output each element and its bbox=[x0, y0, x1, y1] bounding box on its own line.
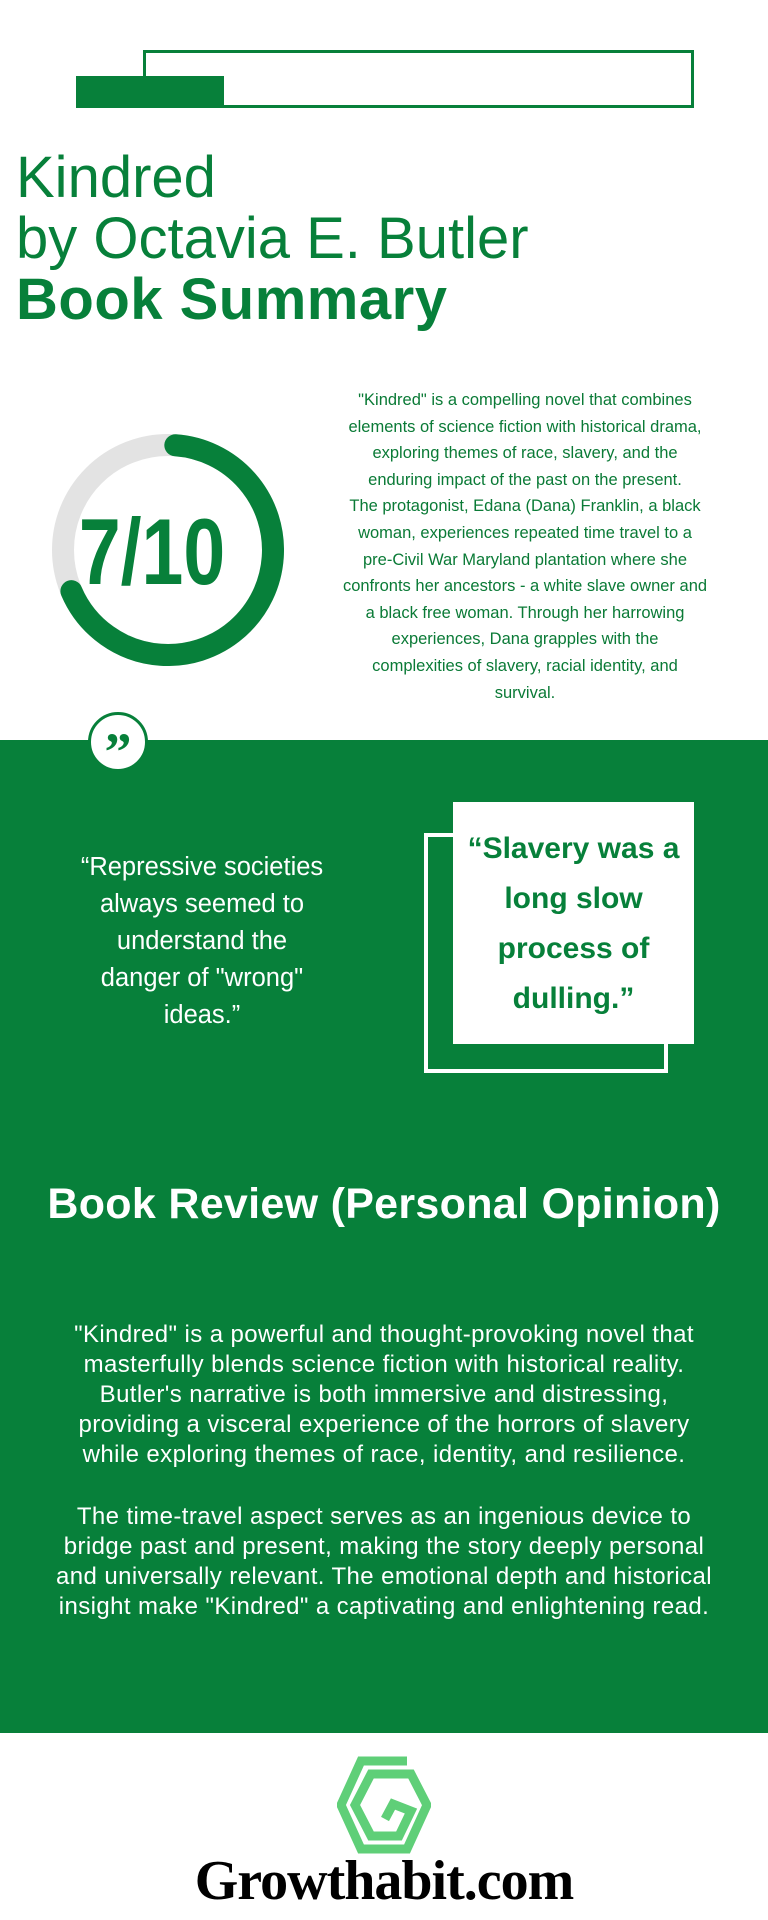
summary text: exploring themes of race, slavery, and the bbox=[372, 444, 678, 462]
green section bbox=[0, 740, 768, 1733]
title: by Octavia E. Butler bbox=[16, 206, 529, 271]
quote left: understand the bbox=[117, 927, 287, 955]
summary text: experiences, Dana grapples with the bbox=[392, 630, 658, 648]
review text: while exploring themes of race, identity, and resilience. bbox=[83, 1441, 685, 1468]
title: Kindred bbox=[16, 145, 216, 210]
summary text: survival. bbox=[495, 684, 555, 702]
review text: masterfully blends science fiction with historical reality. bbox=[84, 1351, 684, 1378]
title bbox=[16, 145, 529, 332]
header decoration bbox=[76, 50, 694, 108]
summary text: woman, experiences repeated time travel to a bbox=[358, 524, 692, 542]
quote left: danger of "wrong" bbox=[101, 964, 303, 992]
quote left: ideas.” bbox=[164, 1001, 240, 1029]
review text: and universally relevant. The emotional depth and historical bbox=[56, 1563, 712, 1590]
review text: The time-travel aspect serves as an ingenious device to bbox=[77, 1503, 691, 1530]
quote box right bbox=[424, 802, 694, 1073]
title: Book Summary bbox=[16, 267, 447, 332]
review text: insight make "Kindred" a captivating and enlightening read. bbox=[59, 1593, 709, 1620]
quote text right: long slow bbox=[504, 882, 643, 915]
quote left: “Repressive societies bbox=[81, 853, 323, 881]
summary text: "Kindred" is a compelling novel that combines bbox=[358, 391, 692, 409]
review heading: Book Review (Personal Opinion) bbox=[47, 1180, 721, 1228]
icon: quote circle bbox=[88, 712, 148, 772]
review text: Butler's narrative is both immersive and distressing, bbox=[100, 1381, 668, 1408]
brand text: Growthabit.com bbox=[195, 1850, 573, 1912]
rating ring bbox=[52, 434, 284, 666]
summary text bbox=[343, 391, 707, 702]
summary text: The protagonist, Edana (Dana) Franklin, a black bbox=[349, 497, 701, 515]
rating ring: 7/10 bbox=[79, 500, 225, 605]
quote left: always seemed to bbox=[100, 890, 304, 918]
quote text right: process of bbox=[498, 932, 649, 965]
icon: logo bbox=[337, 1756, 431, 1854]
summary text: complexities of slavery, racial identity, and bbox=[372, 657, 678, 675]
review text: bridge past and present, making the story deeply personal bbox=[64, 1533, 704, 1560]
icon: quote circle: ” bbox=[104, 722, 132, 782]
summary text: enduring impact of the past on the present. bbox=[368, 471, 682, 489]
quote text right bbox=[468, 832, 680, 1015]
review text bbox=[56, 1321, 712, 1620]
summary text: pre-Civil War Maryland plantation where she bbox=[363, 551, 687, 569]
quote text right: “Slavery was a bbox=[468, 832, 679, 865]
review text: providing a visceral experience of the horrors of slavery bbox=[78, 1411, 690, 1438]
summary text: confronts her ancestors - a white slave owner and bbox=[343, 577, 707, 595]
summary text: a black free woman. Through her harrowing bbox=[366, 604, 684, 622]
quote text right: dulling.” bbox=[513, 982, 634, 1015]
quote left bbox=[81, 853, 323, 1029]
summary text: elements of science fiction with historical drama, bbox=[348, 418, 702, 436]
review text: "Kindred" is a powerful and thought-provoking novel that bbox=[74, 1321, 694, 1348]
